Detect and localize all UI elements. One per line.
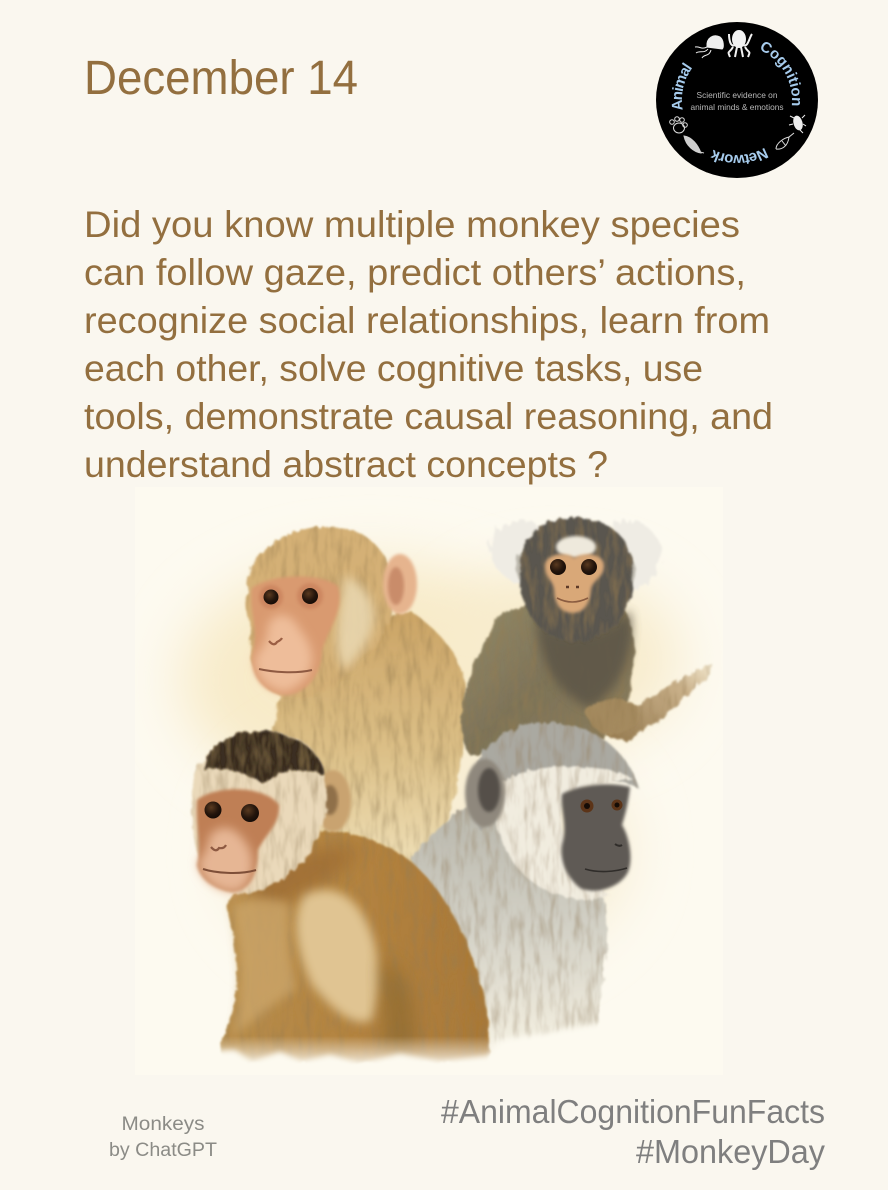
logo tagline: Scientific evidence on <box>696 90 778 100</box>
icon: paw <box>670 117 687 133</box>
ear <box>383 554 417 614</box>
monkey: rhesus macaque <box>246 527 466 870</box>
illustration: four monkey species watercolor <box>164 514 713 1064</box>
monkey: capped macaque <box>192 731 489 1063</box>
face <box>251 576 340 695</box>
logo tagline <box>690 90 784 112</box>
icon: beetle <box>789 115 806 133</box>
hashtags <box>441 1093 825 1170</box>
question text block: Did you know multiple monkey species <box>84 204 740 245</box>
caption: image credit <box>109 1114 217 1161</box>
illustration bottom fade <box>219 1021 598 1067</box>
caption: image credit: Monkeys <box>122 1114 204 1135</box>
tail <box>606 664 712 742</box>
face <box>197 789 279 892</box>
icon: feather <box>684 136 704 153</box>
caption: image credit: by ChatGPT <box>109 1140 217 1161</box>
question text block: recognize social relationships, learn from <box>84 300 770 341</box>
logo ring text <box>672 42 801 164</box>
icon: fish <box>776 133 794 149</box>
illustration paper and wash <box>164 542 692 922</box>
question text block: each other, solve cognitive tasks, use <box>84 348 703 389</box>
logo ring text: Network <box>710 148 768 164</box>
title: date: December 14 <box>84 52 358 105</box>
hashtags: #AnimalCognitionFunFacts <box>441 1093 825 1130</box>
ear <box>465 759 505 827</box>
hands <box>584 699 638 735</box>
ear <box>315 770 351 832</box>
monkey: marmoset <box>461 518 712 755</box>
question text block: tools, demonstrate causal reasoning, and <box>84 396 773 437</box>
logo ring text: Cognition <box>761 42 801 106</box>
icon: octopus <box>729 31 752 57</box>
monkey: vervet <box>411 723 640 1060</box>
logo tagline: animal minds & emotions <box>690 102 784 112</box>
face <box>545 554 604 613</box>
ear tufts <box>488 520 662 592</box>
dark cap <box>204 731 325 783</box>
logo ring text: Animal <box>672 62 692 110</box>
question text block: can follow gaze, predict others’ actions, <box>84 252 746 293</box>
icon: jellyfish <box>695 36 723 58</box>
face <box>562 784 630 891</box>
question text block <box>84 204 773 485</box>
question text block: understand abstract concepts ? <box>84 444 608 485</box>
logo: Animal Cognition Network badge <box>656 22 818 178</box>
hashtags: #MonkeyDay <box>636 1133 825 1170</box>
